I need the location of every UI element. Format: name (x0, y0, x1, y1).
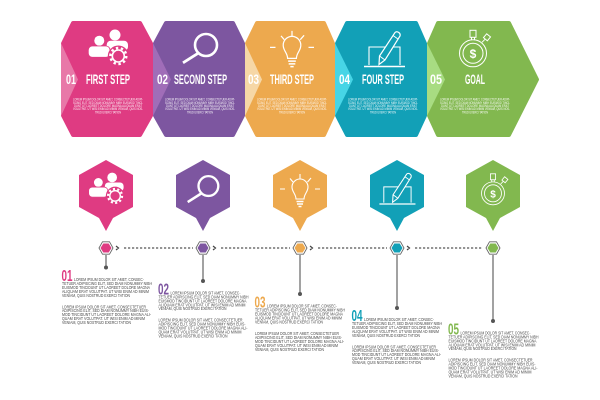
text block: DUNT UT LAOREET DOLORE MAGNA ALIQUAM ERAT (349, 104, 417, 108)
text block: LOREM IPSUM DOLOR SIT AMET, CONSECTETUER ADIPI- (348, 98, 418, 102)
text block 02: LOREM IPSUM DOLOR SIT AMET, CONSEC- (170, 290, 241, 295)
text block 04: ALIQUAM ERAT VOLUTPAT. UT WISI ENIM AD MINIM (352, 329, 439, 334)
text block: SCING ELIT, SED DIAM NONUMMY NIBH EUISMOD TINCI- (440, 101, 510, 105)
text block 01 (62, 268, 152, 325)
text block 04: VENIAM, QUIS NOSTRUD EXERCI TATION (352, 333, 420, 338)
text block: DUNT UT LAOREET DOLORE MAGNA ALIQUAM ERAT (441, 104, 509, 108)
text block 04: ADIPISCING ELIT, SED DIAM NONUMMY NIBH EUIS- (352, 348, 439, 353)
text block: TRUD EXERCI TATION (462, 110, 488, 114)
text block 02: VENIAM, QUIS NOSTRUD EXERCI TATION (158, 334, 228, 339)
text block (440, 98, 510, 114)
text block 03: TETUER ADIPISCING ELIT, SED DIAM NONUMMY NIBH (255, 308, 345, 313)
icon: magnifier (183, 34, 217, 63)
drop line 3 (298, 255, 302, 296)
icon: people and gear (88, 30, 129, 66)
text block 05: ALIQUAM ERAT VOLUTPAT. UT WISI ENIM AD MINIM (448, 342, 536, 347)
text block 02: 02 (158, 281, 169, 298)
text block 04: TETUER ADIPISCING ELIT, SED DIAM NONUMMY NIBH (352, 321, 442, 326)
text block: DUNT UT LAOREET DOLORE MAGNA ALIQUAM ERAT (74, 104, 142, 108)
heading: four step: FOUR STEP (362, 71, 404, 87)
pin: first step (79, 160, 133, 231)
drop line 5 (491, 255, 495, 323)
text block: SCING ELIT, SED DIAM NONUMMY NIBH EUISMOD TINCI- (165, 101, 235, 105)
pin: goal (466, 160, 520, 231)
pin: four step (370, 160, 424, 231)
text block: TRUD EXERCI TATION (279, 110, 305, 114)
text block 02: TETUER ADIPISCING ELIT, SED DIAM NONUMMY NIBH (158, 294, 248, 299)
panel: second step (153, 23, 243, 135)
text block 05: MOD TINCIDUNT UT LAOREET DOLORE MAGNA ALI- (448, 366, 538, 371)
text block: VOLUTPAT. UT WISI ENIM AD MINIM VENIAM, QUIS NOS- (257, 107, 327, 111)
text block 03: MOD TINCIDUNT UT LAOREET DOLORE MAGNA ALI- (255, 339, 344, 344)
text block (165, 98, 235, 114)
text block 02: VENIAM, QUIS NOSTRUD EXERCI TATION (158, 306, 226, 311)
text block 01: ADIPISCING ELIT, SED DIAM NONUMMY NIBH EUIS- (62, 308, 149, 313)
text block 05: VENIAM, QUIS NOSTRUD EXERCI TATION (448, 346, 516, 351)
text block (73, 98, 143, 114)
text block 02: EUISMOD TINCIDUNT UT LAOREET DOLORE MAGNA (158, 298, 247, 303)
icon: stopwatch (460, 30, 491, 67)
text block 03: VENIAM, QUIS NOSTRUD EXERCI TATION (255, 319, 323, 324)
text block 04: 04 (352, 308, 363, 325)
panel: goal step: GOAL (465, 71, 485, 87)
text block 05: VENIAM, QUIS NOSTRUD EXERCI TATION (448, 374, 518, 379)
dollar sign: $ (470, 47, 477, 61)
number: 01: 01 (66, 71, 76, 87)
text block (348, 98, 418, 114)
text block 01: VENIAM, QUIS NOSTRUD EXERCI TATION (62, 320, 131, 325)
node 1 (99, 242, 113, 254)
text block 01: QUAM ERAT VOLUTPAT. UT WISI ENIM AD MINIM (62, 316, 145, 321)
text block: VOLUTPAT. UT WISI ENIM AD MINIM VENIAM, QUIS NOS- (440, 107, 510, 111)
text block: VOLUTPAT. UT WISI ENIM AD MINIM VENIAM, QUIS NOS- (348, 107, 418, 111)
chevron: four (335, 43, 353, 116)
text block: DUNT UT LAOREET DOLORE MAGNA ALIQUAM ERAT (166, 104, 234, 108)
text block (257, 98, 327, 114)
text block 05: QUAM ERAT VOLUTPAT. UT WISI ENIM AD MINIM (448, 370, 532, 375)
text block: SCING ELIT, SED DIAM NONUMMY NIBH EUISMOD TINCI- (73, 101, 143, 105)
text block 05 (448, 321, 538, 378)
number: 05: 05 (430, 71, 442, 87)
panel: first step (61, 23, 151, 135)
number: 04: 04 (339, 71, 350, 87)
text block 01: LOREM IPSUM DOLOR SIT AMET, CONSEC- (74, 277, 144, 282)
text block 02: ADIPISCING ELIT, SED DIAM NONUMMY NIBH EUIS- (158, 322, 246, 327)
text block 01: VENIAM, QUIS NOSTRUD EXERCI TATION (62, 293, 130, 298)
text block 03 (254, 295, 345, 352)
text block: SCING ELIT, SED DIAM NONUMMY NIBH EUISMOD TINCI- (348, 101, 418, 105)
text block 03: QUAM ERAT VOLUTPAT. UT WISI ENIM AD MINIM (255, 343, 338, 348)
text block: LOREM IPSUM DOLOR SIT AMET, CONSECTETUER ADIPI- (257, 98, 327, 102)
text block 03: ALIQUAM ERAT VOLUTPAT. UT WISI ENIM AD MINIM (255, 316, 342, 321)
text block 04: VENIAM, QUIS NOSTRUD EXERCI TATION (352, 360, 421, 365)
drop line 4 (395, 255, 399, 310)
text block 02: LOREM IPSUM DOLOR SIT AMET, CONSECTETUER (158, 318, 242, 323)
drop line 2 (201, 255, 205, 283)
text block: TRUD EXERCI TATION (370, 110, 396, 114)
pin: goal: $ (490, 190, 496, 200)
text block: DUNT UT LAOREET DOLORE MAGNA ALIQUAM ERAT (258, 104, 326, 108)
number: 03: 03 (248, 71, 259, 87)
node 3 (293, 242, 307, 254)
chevron: goal (427, 43, 445, 116)
node 5 (486, 242, 500, 254)
text block 04: LOREM IPSUM DOLOR SIT AMET, CONSECTETUER (352, 344, 436, 349)
text block 05: EUISMOD TINCIDUNT UT LAOREET DOLORE MAGNA (448, 338, 537, 343)
heading: third step: THIRD STEP (270, 71, 314, 87)
text block: TRUD EXERCI TATION (187, 110, 213, 114)
node 2 (196, 242, 210, 254)
panel: goal step (427, 23, 537, 135)
pin: second step (176, 160, 230, 231)
heading: first step: FIRST STEP (86, 71, 130, 87)
node 4 (390, 242, 404, 254)
panel: third step (245, 23, 333, 135)
timeline dashed connector (116, 246, 483, 250)
text block: LOREM IPSUM DOLOR SIT AMET, CONSECTETUER ADIPI- (440, 98, 510, 102)
text block 02: ALIQUAM ERAT VOLUTPAT. UT WISI ENIM AD MINIM (158, 302, 246, 307)
text block 01: LOREM IPSUM DOLOR SIT AMET, CONSECTETUER (62, 304, 146, 309)
text block: VOLUTPAT. UT WISI ENIM AD MINIM VENIAM, QUIS NOS- (165, 107, 235, 111)
text block 04: LOREM IPSUM DOLOR SIT AMET, CONSEC- (364, 317, 434, 322)
text block 02 (158, 281, 248, 338)
text block 03: LOREM IPSUM DOLOR SIT AMET, CONSECTETUER (255, 331, 339, 336)
text block: VOLUTPAT. UT WISI ENIM AD MINIM VENIAM, QUIS NOS- (73, 107, 143, 111)
icon: laptop and pencil (364, 32, 405, 66)
number: 02: 02 (157, 71, 168, 87)
heading: second step: SECOND STEP (174, 71, 227, 87)
chevron: second (153, 43, 171, 116)
text block 04 (352, 308, 442, 365)
text block 01: 01 (62, 268, 73, 285)
text block 03: 03 (254, 295, 266, 312)
panel: four step (335, 23, 425, 135)
text block 05: LOREM IPSUM DOLOR SIT AMET, CONSEC- (460, 330, 531, 335)
chevron: first (61, 43, 78, 116)
text block: TRUD EXERCI TATION (95, 110, 121, 114)
text block 01: TETUER ADIPISCING ELIT, SED DIAM NONUMMY NIBH (62, 281, 152, 286)
text block 03: EUISMOD TINCIDUNT UT LAOREET DOLORE MAGNA (255, 312, 343, 317)
text block 02: MOD TINCIDUNT UT LAOREET DOLORE MAGNA ALI- (158, 326, 248, 331)
text block 01: ALIQUAM ERAT VOLUTPAT. UT WISI ENIM AD MINIM (62, 289, 149, 294)
text block 03: VENIAM, QUIS NOSTRUD EXERCI TATION (255, 347, 324, 352)
text block 05: LOREM IPSUM DOLOR SIT AMET, CONSECTETUER (448, 358, 532, 363)
icon: light bulb (270, 31, 314, 67)
text block 05: TETUER ADIPISCING ELIT, SED DIAM NONUMMY NIBH (448, 334, 538, 339)
pin: third step (273, 160, 327, 231)
text block 05: 05 (448, 321, 459, 338)
text block: SCING ELIT, SED DIAM NONUMMY NIBH EUISMOD TINCI- (257, 101, 327, 105)
text block 04: EUISMOD TINCIDUNT UT LAOREET DOLORE MAGNA (352, 325, 440, 330)
text block 01: EUISMOD TINCIDUNT UT LAOREET DOLORE MAGNA (62, 285, 150, 290)
text block 05: ADIPISCING ELIT, SED DIAM NONUMMY NIBH EUIS- (448, 362, 536, 367)
text block 03: LOREM IPSUM DOLOR SIT AMET, CONSEC- (267, 304, 337, 309)
text block 02: QUAM ERAT VOLUTPAT. UT WISI ENIM AD MINIM (158, 330, 242, 335)
text block: LOREM IPSUM DOLOR SIT AMET, CONSECTETUER ADIPI- (165, 98, 235, 102)
text block 01: MOD TINCIDUNT UT LAOREET DOLORE MAGNA ALI- (62, 312, 151, 317)
text block 03: ADIPISCING ELIT, SED DIAM NONUMMY NIBH EUIS- (255, 335, 342, 340)
text block 04: MOD TINCIDUNT UT LAOREET DOLORE MAGNA ALI- (352, 352, 441, 357)
text block 04: QUAM ERAT VOLUTPAT. UT WISI ENIM AD MINIM (352, 356, 435, 361)
drop line 1 (104, 255, 108, 270)
text block: LOREM IPSUM DOLOR SIT AMET, CONSECTETUER ADIPI- (73, 98, 143, 102)
chevron: third (245, 43, 262, 116)
